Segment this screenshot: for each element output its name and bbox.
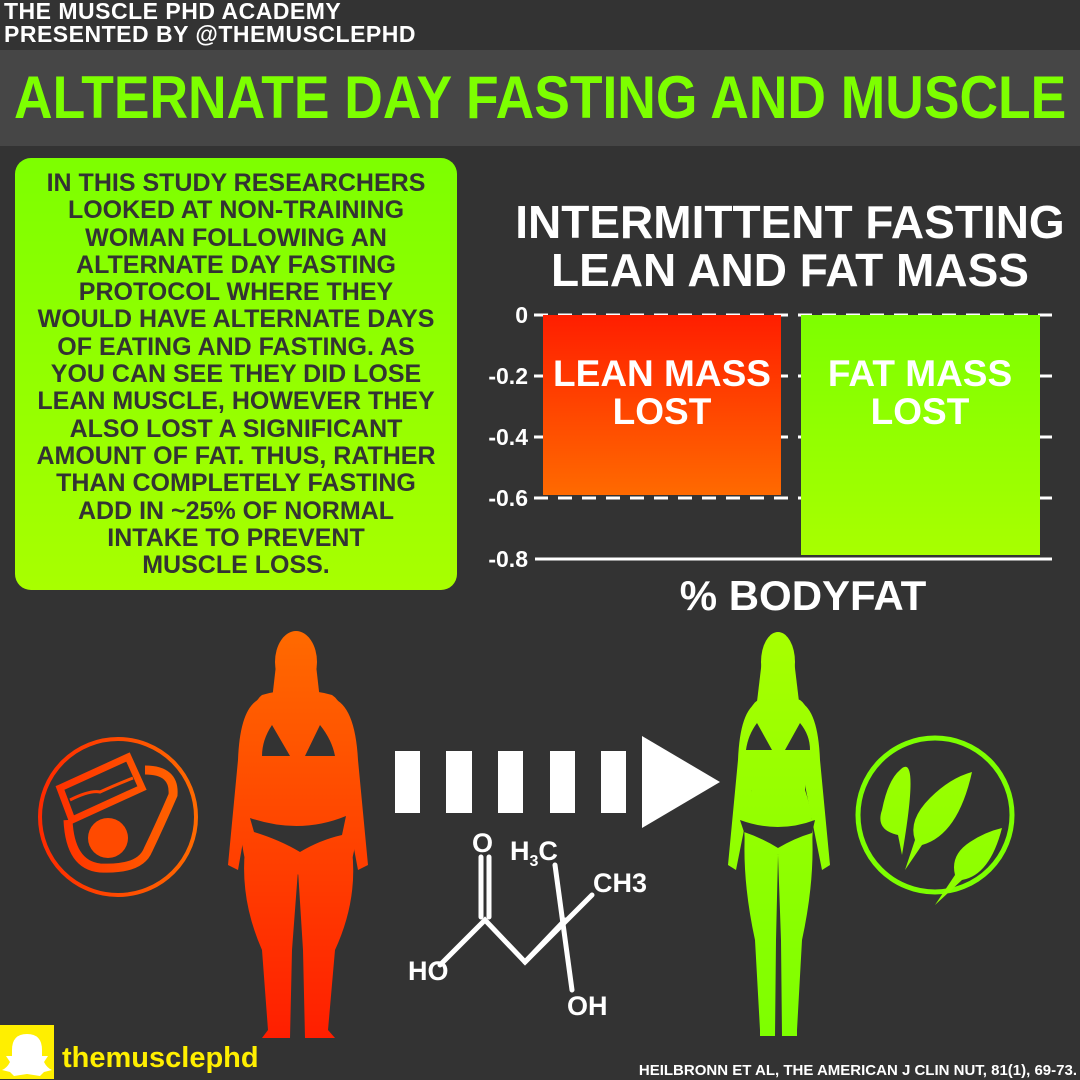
snapchat logo — [0, 1025, 54, 1079]
axis labels: 0 — [515, 302, 528, 328]
text panel: study summary: WOMAN FOLLOWING AN — [85, 224, 387, 252]
text panel: study summary: WOULD HAVE ALTERNATE DAYS — [38, 305, 434, 333]
fat mass bar — [801, 315, 1040, 555]
text panel: study summary: OF EATING AND FASTING. AS — [57, 333, 415, 361]
chart title — [515, 196, 1065, 296]
title band — [0, 50, 1080, 146]
text panel: study summary: ADD IN ~25% OF NORMAL — [78, 497, 394, 525]
icon: bacon and egg — [40, 739, 196, 895]
fat mass bar: FAT MASS — [828, 353, 1012, 394]
chemical structure: CH3 — [593, 868, 647, 898]
text panel: study summary: YOU CAN SEE THEY DID LOSE — [51, 360, 421, 388]
axis labels — [488, 302, 528, 572]
header: academy — [4, 0, 416, 47]
chemical structure: OH — [567, 991, 608, 1021]
chemical structure — [408, 828, 647, 1021]
axis labels: -0.8 — [488, 546, 528, 572]
title band: ALTERNATE DAY FASTING AND MUSCLE — [14, 64, 1066, 131]
figure: after (green woman) — [728, 632, 830, 1036]
arrow — [395, 736, 720, 828]
chemical structure: 3 — [530, 853, 538, 870]
text panel: study summary: ALTERNATE DAY FASTING — [76, 251, 396, 279]
axis labels: -0.2 — [488, 363, 528, 389]
text panel: study summary: AMOUNT OF FAT. THUS, RATHER — [36, 442, 436, 470]
bottom illustration — [0, 631, 1077, 1079]
axis labels: -0.6 — [488, 485, 528, 511]
text panel: study summary — [15, 158, 457, 590]
fat mass bar: LOST — [871, 391, 970, 432]
header: academy: PRESENTED BY @THEMUSCLEPHD — [4, 21, 416, 47]
text panel: study summary: INTAKE TO PREVENT — [107, 524, 365, 552]
lean mass bar: LOST — [613, 391, 712, 432]
text panel: study summary: MUSCLE LOSS. — [142, 551, 330, 579]
text panel: study summary: THAN COMPLETELY FASTING — [56, 469, 416, 497]
chart title: LEAN AND FAT MASS — [551, 244, 1029, 296]
text panel: study summary: ALSO LOST A SIGNIFICANT — [70, 415, 402, 443]
icon: spinach leaves — [858, 738, 1012, 905]
handle text: themusclephd — [62, 1042, 259, 1074]
chemical structure: O — [472, 828, 493, 858]
lean mass bar: LEAN MASS — [553, 353, 771, 394]
figure: before (orange woman) — [228, 631, 368, 1038]
text panel: study summary: IN THIS STUDY RESEARCHERS — [47, 169, 425, 197]
citation: HEILBRONN ET AL, THE AMERICAN J CLIN NUT, 81(1), 69-73. — [639, 1062, 1077, 1079]
chemical structure: H — [510, 836, 530, 866]
chart title: INTERMITTENT FASTING — [515, 196, 1065, 248]
x axis label: % BODYFAT — [680, 572, 927, 619]
lean mass bar — [543, 315, 781, 495]
axis labels: -0.4 — [488, 424, 528, 450]
text panel: study summary: LEAN MUSCLE, HOWEVER THEY — [37, 387, 435, 415]
chemical structure: C — [538, 836, 558, 866]
text panel: study summary: PROTOCOL WHERE THEY — [79, 278, 393, 306]
text panel: study summary: LOOKED AT NON-TRAINING — [68, 196, 404, 224]
chemical structure: HO — [408, 956, 448, 986]
bar chart — [488, 302, 1052, 619]
